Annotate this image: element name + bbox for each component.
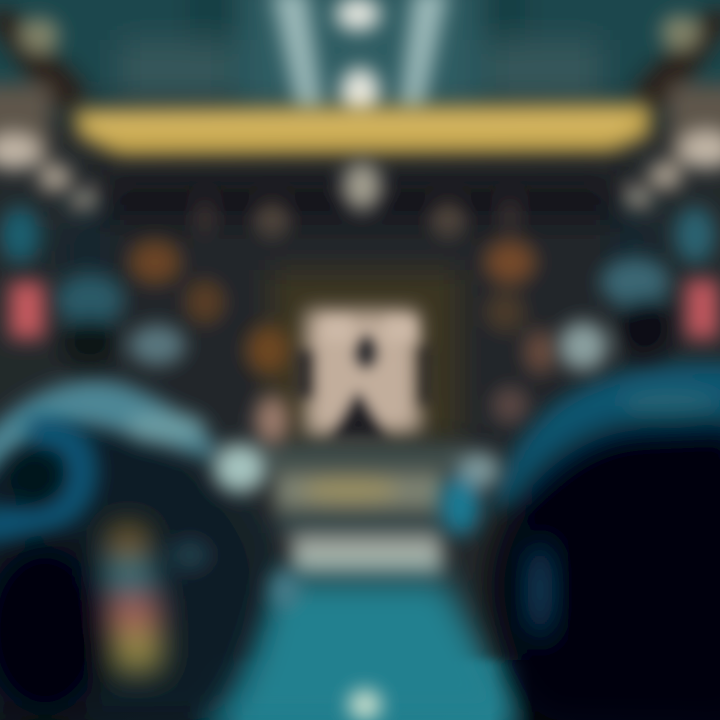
- left figure front glow: [214, 396, 299, 610]
- left red sign: [10, 282, 44, 338]
- stage steps: [265, 445, 465, 575]
- crowd lights on the wall: [129, 162, 556, 423]
- dark stage wall: [60, 175, 660, 445]
- right figure head: [559, 258, 673, 370]
- right figure side glow: [440, 452, 500, 535]
- left figure inner highlight: [170, 539, 210, 571]
- right figure: [440, 258, 720, 720]
- ceiling: [0, 0, 720, 110]
- left figure blue sleeve ring: [0, 434, 80, 525]
- side wall teal lights: [0, 207, 715, 263]
- left figure dark torso: [0, 545, 107, 715]
- left figure colourful backpack: [102, 525, 162, 672]
- right figure inner blue highlight: [526, 540, 554, 640]
- left figure arm arc: [0, 380, 225, 495]
- teal floor: [200, 580, 520, 720]
- right figure dark torso: [490, 425, 720, 720]
- side rafters and lamps: [0, 10, 720, 217]
- floor light: [349, 690, 381, 720]
- bottom edge tones: [0, 650, 720, 720]
- left figure head: [56, 274, 185, 366]
- left figure body: [0, 412, 266, 720]
- left figure: [0, 274, 299, 720]
- yellow banner: [74, 104, 650, 156]
- right red sign: [686, 280, 718, 338]
- left figure dark core: [9, 452, 61, 504]
- right figure blue shoulder: [495, 363, 720, 510]
- white emblem on stage: [295, 310, 432, 440]
- ceiling light beams: [272, 0, 448, 116]
